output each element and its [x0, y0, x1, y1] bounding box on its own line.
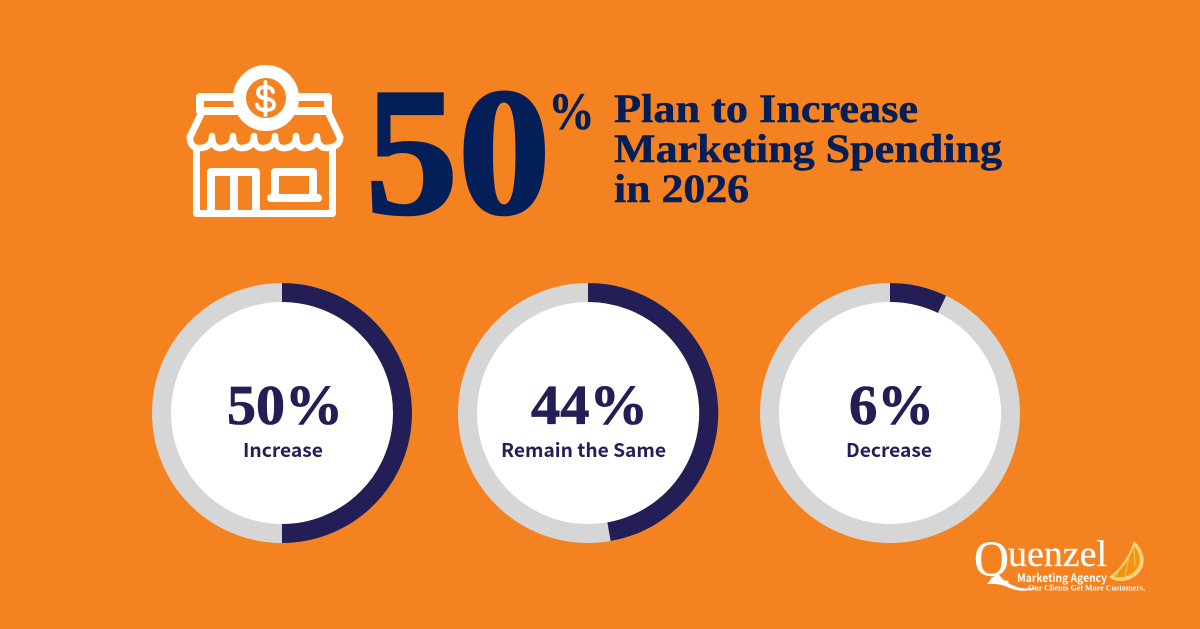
donut: 50% increase — [162, 292, 402, 534]
donut: 6% decrease: Decrease — [846, 436, 932, 463]
donut: 50% increase: 50% — [227, 375, 343, 437]
logo: Quenzel Marketing Agency — [974, 530, 1145, 592]
donut: 6% decrease: 6% — [849, 375, 934, 437]
donut: 44% remain the same — [468, 292, 709, 534]
heading: plan to increase marketing spending: Marketing Spending — [614, 126, 1002, 171]
donut: 44% remain the same: Remain the Same — [501, 436, 666, 463]
logo: Quenzel Marketing Agency: uenzel — [1008, 534, 1107, 575]
heading: plan to increase marketing spending: Plan to Increase — [614, 86, 918, 131]
icon: storefront with dollar coin — [190, 72, 340, 214]
logo: Quenzel Marketing Agency: Our Clients Get More Customers. — [1028, 582, 1145, 592]
logo: Quenzel Marketing Agency: Q — [974, 530, 1009, 586]
heading: plan to increase marketing spending: in 2026 — [614, 166, 749, 211]
heading: plan to increase marketing spending — [614, 86, 1002, 211]
logo: Quenzel Marketing Agency: Marketing Agency — [1017, 570, 1107, 586]
big statistic 50%: % — [548, 84, 594, 141]
icon: orange slice — [1109, 541, 1144, 581]
donut: 44% remain the same: 44% — [531, 375, 648, 437]
donut: 6% decrease — [770, 292, 1010, 534]
big statistic 50%: 50 — [366, 52, 550, 253]
donut: 50% increase: Increase — [243, 436, 323, 463]
